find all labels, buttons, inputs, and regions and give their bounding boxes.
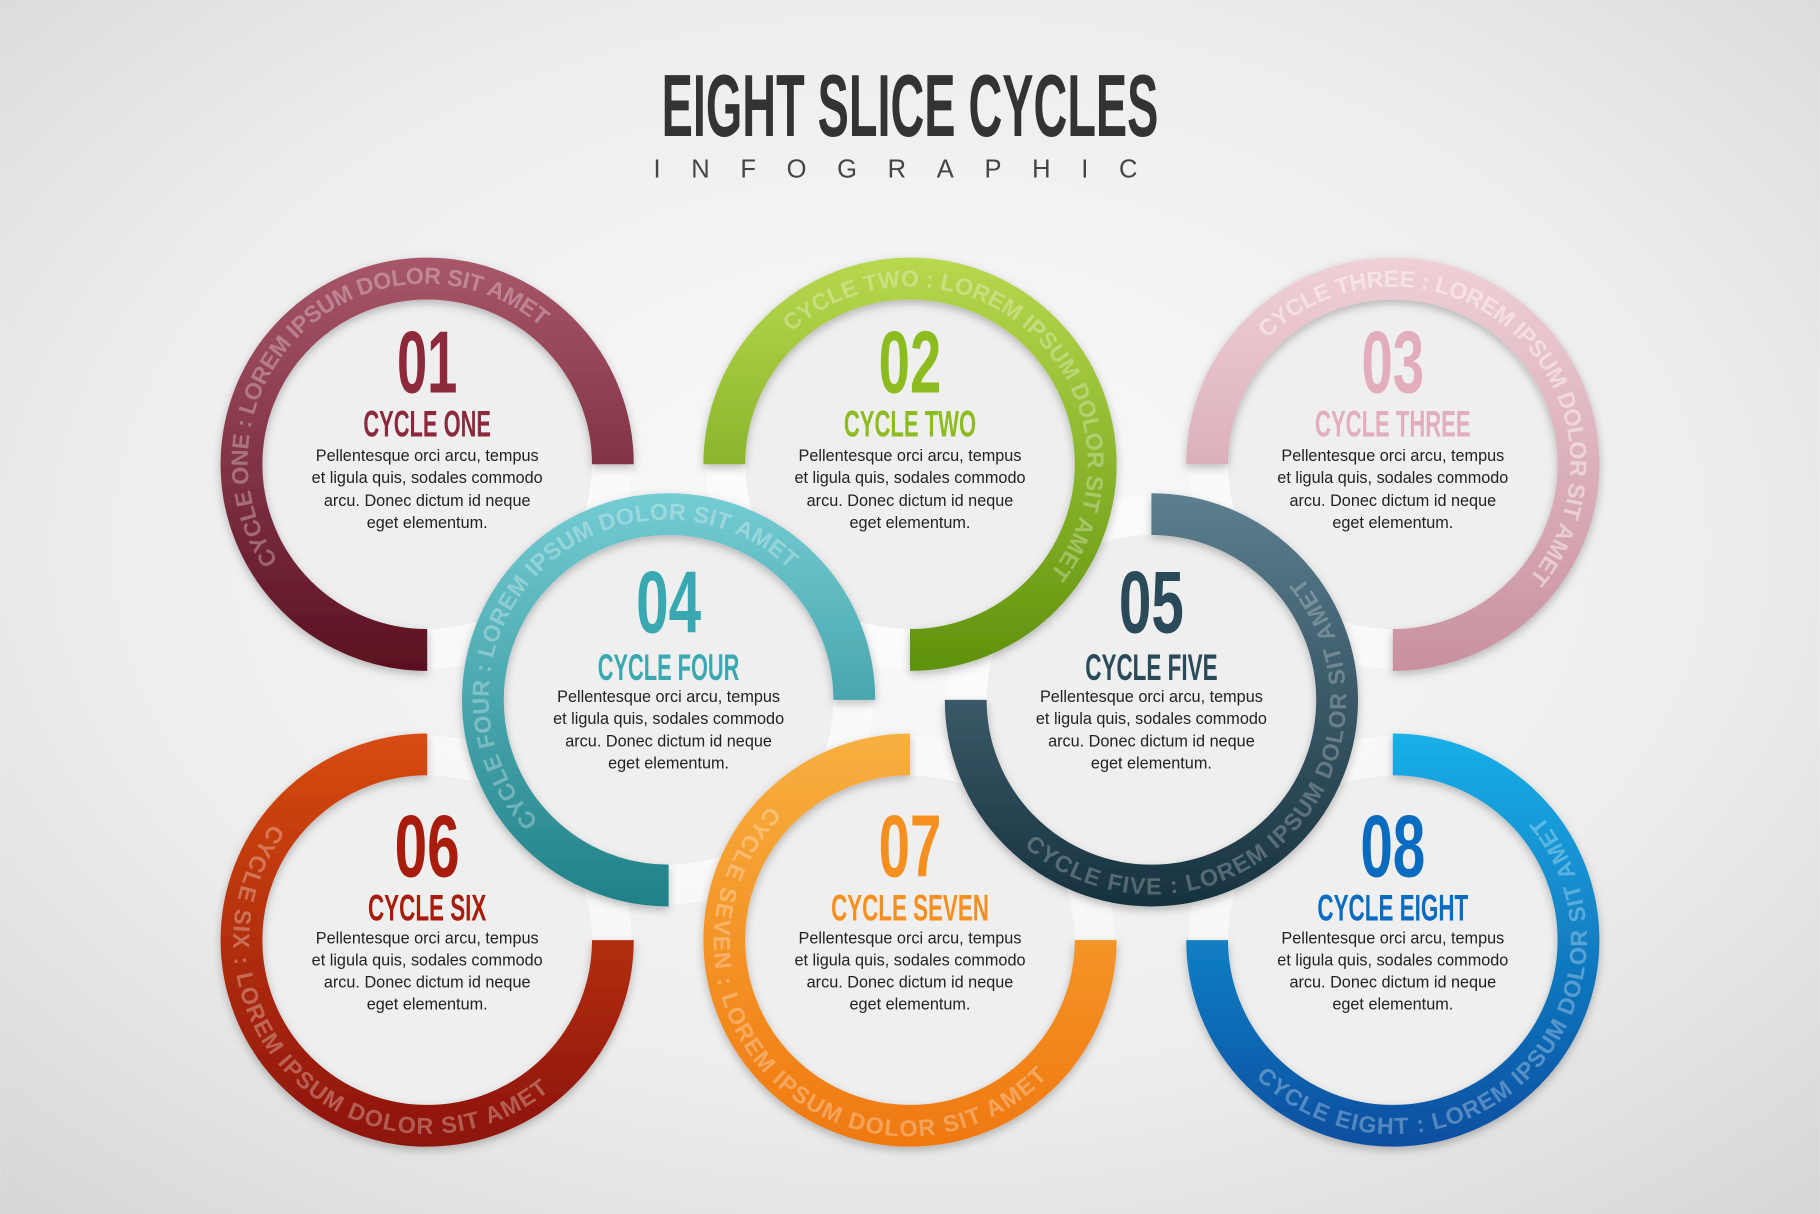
content 02: arcu. Donec dictum id neque [807, 492, 1013, 510]
content 02: eget elementum. [850, 514, 970, 532]
content 08: Pellentesque orci arcu, tempus [1281, 930, 1504, 948]
content 01: arcu. Donec dictum id neque [324, 492, 531, 510]
ring 03 [1182, 256, 1604, 679]
ring 03: CYCLE THREE : LOREM IPSUM DOLOR SIT AMET [1260, 270, 1586, 588]
content 07: Pellentesque orci arcu, tempus [799, 930, 1021, 948]
content 01: eget elementum. [367, 514, 488, 532]
content 05: 05 [1119, 553, 1184, 652]
content 05: et ligula quis, sodales commodo [1036, 710, 1267, 728]
content 06: 06 [395, 796, 460, 895]
content 05: eget elementum. [1091, 754, 1212, 772]
content 03: CYCLE THREE [1315, 402, 1471, 444]
content 03: et ligula quis, sodales commodo [1277, 469, 1508, 487]
content 02: 02 [879, 312, 941, 411]
content 06 [312, 796, 543, 1014]
content 03: eget elementum. [1332, 514, 1453, 532]
ring 08: CYCLE EIGHT : LOREM IPSUM DOLOR SIT AMET [1259, 820, 1587, 1134]
ring 07: CYCLE SEVEN : LOREM IPSUM DOLOR SIT AMET [714, 808, 1044, 1137]
content 06: eget elementum. [367, 996, 488, 1014]
content 04 [553, 553, 784, 772]
ring 07 [698, 732, 1121, 1154]
content 01: CYCLE ONE [363, 402, 491, 444]
content 06: et ligula quis, sodales commodo [312, 952, 543, 970]
content 07 [794, 796, 1026, 1014]
content 04: arcu. Donec dictum id neque [565, 732, 772, 750]
content 04: Pellentesque orci arcu, tempus [557, 688, 780, 706]
ring 08 [1182, 732, 1604, 1154]
content 05: CYCLE FIVE [1085, 646, 1218, 688]
title: EIGHT SLICE CYCLES [662, 56, 1158, 155]
content 05 [1036, 553, 1267, 772]
content 07: 07 [879, 796, 941, 895]
content 06: CYCLE SIX [368, 886, 487, 928]
content 06: arcu. Donec dictum id neque [324, 974, 531, 992]
content 08: eget elementum. [1332, 996, 1453, 1014]
ring 05 [940, 492, 1363, 915]
content 04: CYCLE FOUR [598, 646, 740, 688]
content 02 [794, 312, 1026, 532]
content 05: Pellentesque orci arcu, tempus [1040, 688, 1263, 706]
content 03: Pellentesque orci arcu, tempus [1281, 447, 1504, 465]
content 01: Pellentesque orci arcu, tempus [316, 447, 539, 465]
content 04: 04 [636, 553, 701, 652]
content 02: et ligula quis, sodales commodo [794, 469, 1026, 487]
ring 01: CYCLE ONE : LOREM IPSUM DOLOR SIT AMET [232, 268, 551, 566]
content 07: et ligula quis, sodales commodo [794, 952, 1026, 970]
content 06: Pellentesque orci arcu, tempus [316, 930, 539, 948]
content 01: et ligula quis, sodales commodo [312, 469, 543, 487]
content 08: et ligula quis, sodales commodo [1277, 952, 1508, 970]
content 04: eget elementum. [608, 754, 729, 772]
content 08: 08 [1360, 796, 1425, 895]
content 01: 01 [397, 312, 457, 411]
content 07: eget elementum. [850, 996, 970, 1014]
content 05: arcu. Donec dictum id neque [1048, 732, 1255, 750]
ring 05: CYCLE FIVE : LOREM IPSUM DOLOR SIT AMET [1028, 581, 1346, 894]
content 04: et ligula quis, sodales commodo [553, 710, 784, 728]
subtitle: INFOGRAPHIC [654, 156, 1137, 184]
content 03 [1277, 312, 1508, 532]
content 07: arcu. Donec dictum id neque [807, 974, 1013, 992]
content 01 [312, 312, 543, 532]
ring 04 [457, 492, 880, 914]
ring 06 [216, 732, 638, 1154]
content 02: CYCLE TWO [844, 402, 976, 444]
content 07: CYCLE SEVEN [831, 886, 989, 928]
content 08: CYCLE EIGHT [1317, 886, 1468, 928]
content 08 [1277, 796, 1508, 1014]
ring 01 [216, 256, 638, 679]
ring 06: CYCLE SIX : LOREM IPSUM DOLOR SIT AMET [233, 826, 545, 1134]
ring 04: CYCLE FOUR : LOREM IPSUM DOLOR SIT AMET [472, 504, 800, 828]
content 08: arcu. Donec dictum id neque [1289, 974, 1496, 992]
content 02: Pellentesque orci arcu, tempus [799, 447, 1021, 465]
content 03: arcu. Donec dictum id neque [1289, 492, 1496, 510]
ring 02 [699, 256, 1122, 679]
ring 02: CYCLE TWO : LOREM IPSUM DOLOR SIT AMET [784, 270, 1104, 583]
content 03: 03 [1361, 312, 1424, 411]
